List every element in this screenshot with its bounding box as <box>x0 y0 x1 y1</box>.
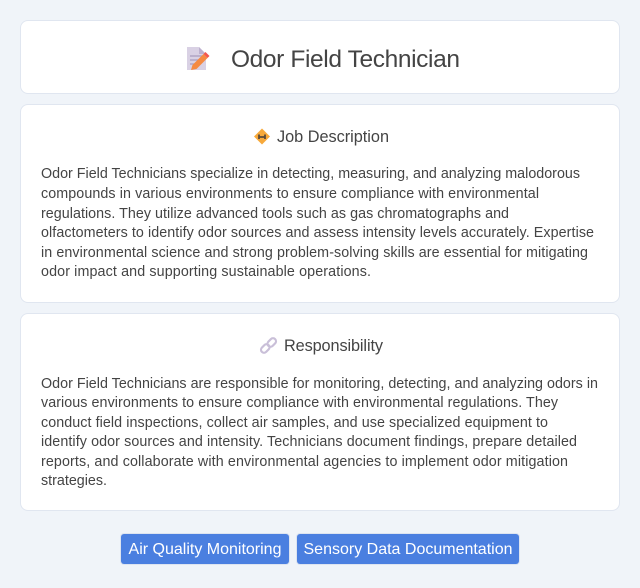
heading: responsibility: Responsibility <box>284 337 384 355</box>
text: responsibility: Odor Field Technicians are responsible for monitoring, detecting, and analyzing odors in <box>41 376 598 392</box>
panel: responsibility card <box>20 313 620 511</box>
panel: job description card <box>20 104 620 303</box>
text: responsibility: strategies. <box>41 473 107 489</box>
heading: job description: Job Description <box>277 128 389 146</box>
tag: sensory data documentation <box>297 534 519 564</box>
icon: diamond sign <box>254 128 270 144</box>
text: responsibility: identify odor sources and intensity. Technicians document findings, prepare detailed <box>41 434 577 450</box>
text: responsibility: various environments to ensure compliance with environmental regulations. They <box>41 395 559 411</box>
tag: sensory data documentation: Sensory Data Documentation <box>304 541 512 558</box>
tag: air quality monitoring: Air Quality Monitoring <box>129 541 281 558</box>
text: responsibility: reports, and collaborate with environmental agencies to implement odor mitigation <box>41 454 568 470</box>
text: job description: olfactometers to identify odor sources and assess intensity levels accurately. Expertise <box>41 225 594 241</box>
text: job description: in environmental science and strong problem-solving skills are essential for mitigating <box>41 245 588 261</box>
text: job description: Odor Field Technicians specialize in detecting, measuring, and analyzing malodorous <box>41 166 580 182</box>
text: responsibility: conduct field inspections, collect air samples, and use specialized equipment to <box>41 415 548 431</box>
text: job description: odor impact and supporting sustainable operations. <box>41 264 371 280</box>
title: Odor Field Technician <box>231 46 460 73</box>
text: job description: compounds in various environments to ensure compliance with environmental <box>41 186 539 202</box>
icon: document with pencil <box>187 47 210 70</box>
icon: chain link <box>260 337 277 354</box>
text: job description: regulations. They utilize advanced tools such as gas chromatographs and <box>41 206 509 222</box>
text: job description <box>41 166 594 280</box>
tag: air quality monitoring <box>121 534 289 564</box>
text: responsibility <box>41 376 598 489</box>
panel: title card <box>20 20 620 94</box>
